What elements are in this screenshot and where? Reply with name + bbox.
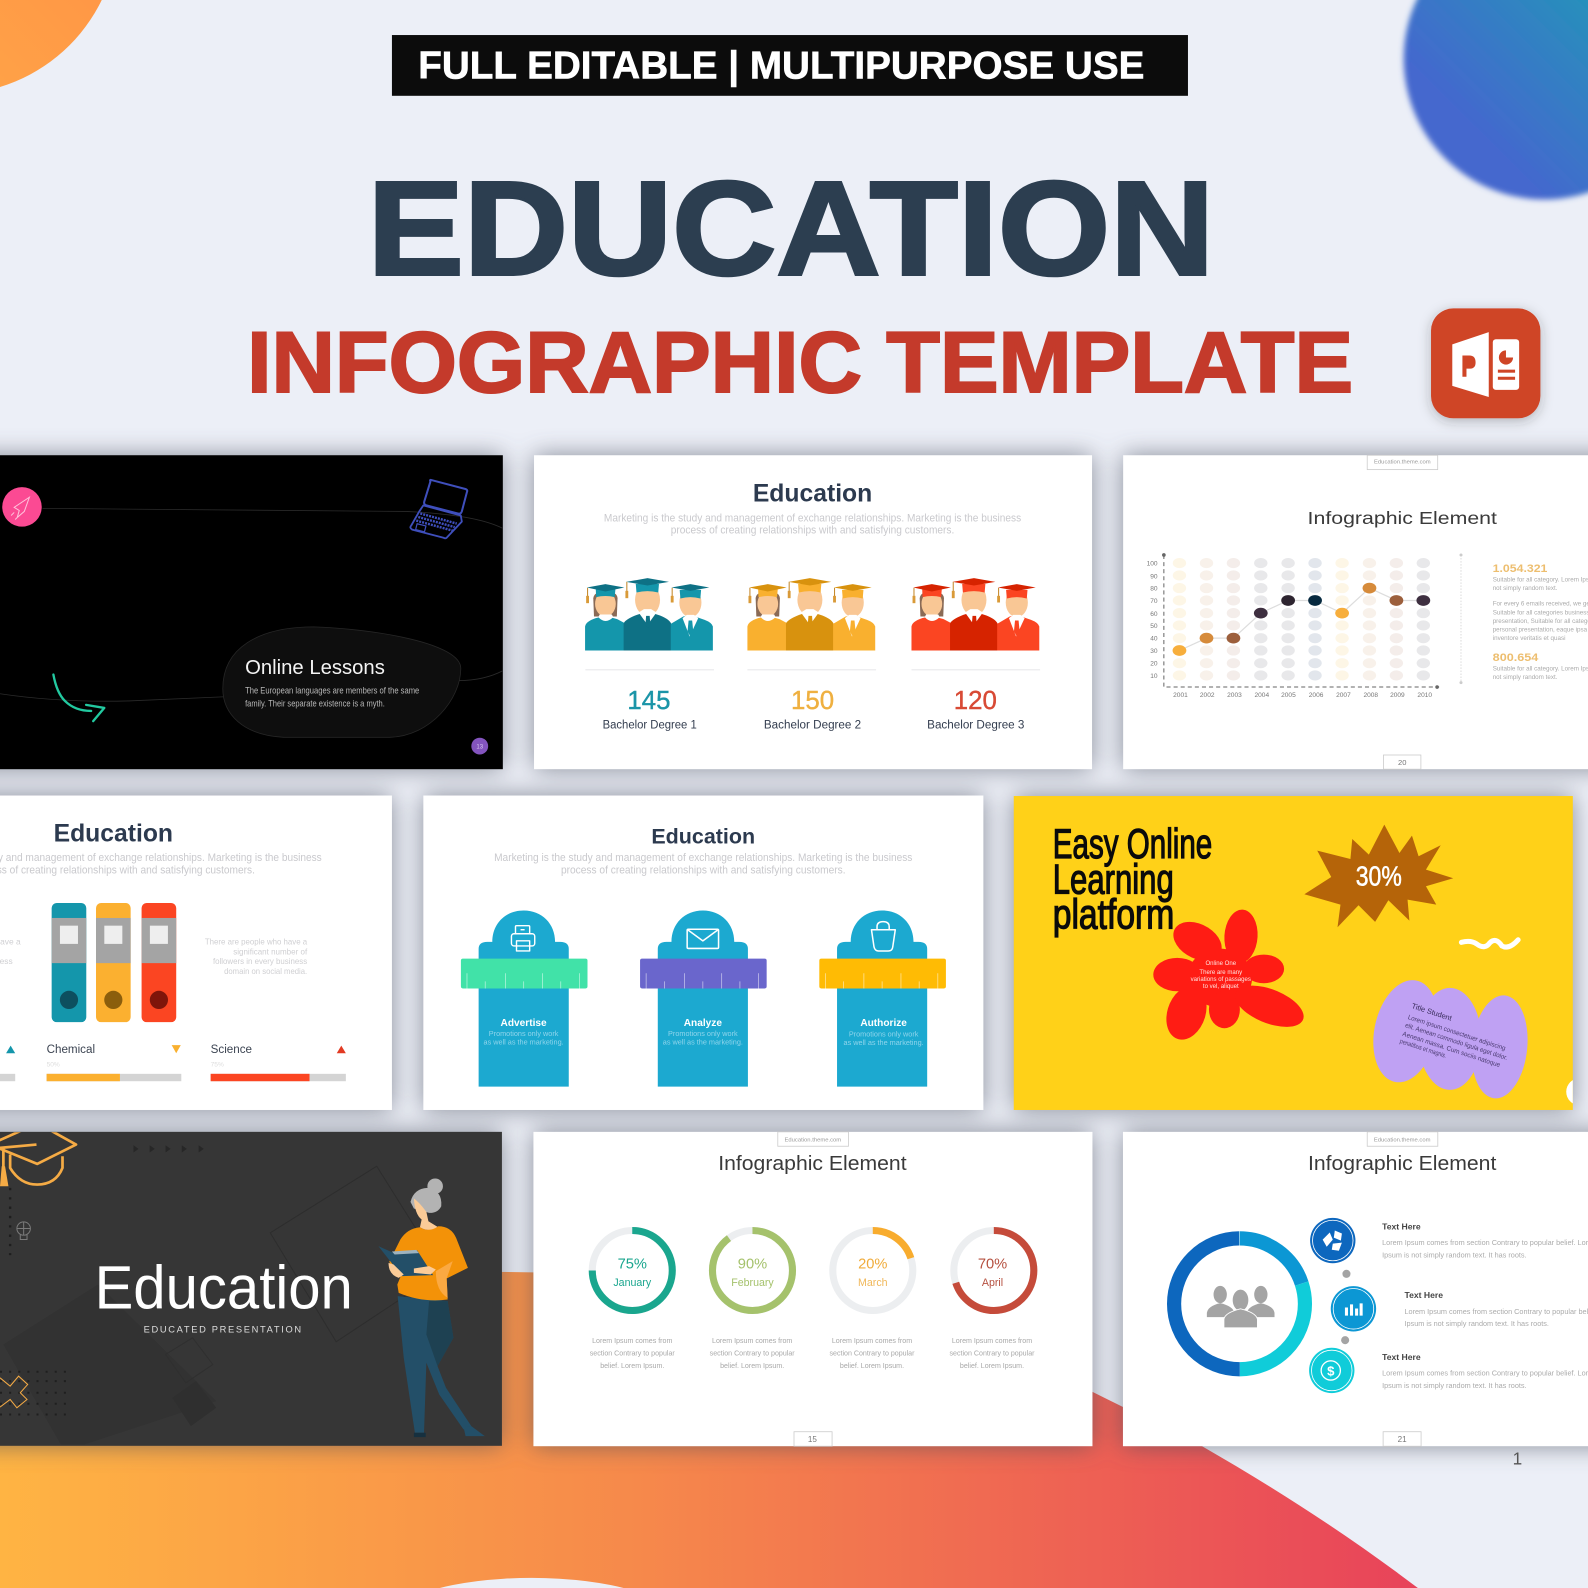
ring: march: section Contrary to popular bbox=[829, 1349, 915, 1357]
pillar: advertise: Promotions only work bbox=[489, 1029, 559, 1038]
description: process of creating relationships with and satisfying customers. bbox=[671, 525, 954, 537]
description bbox=[0, 852, 322, 877]
icon: recycle badge bbox=[1310, 1218, 1355, 1263]
top tab bbox=[1367, 1132, 1438, 1146]
icon: gold graduates bbox=[747, 578, 875, 650]
pillar: analyze: Promotions only work bbox=[668, 1029, 738, 1038]
purple blob callout: penatibus et magnis. bbox=[1399, 1038, 1447, 1060]
heading bbox=[1053, 820, 1212, 938]
chart: dot matrix: 60 bbox=[1150, 611, 1158, 618]
heading: Infographic Element bbox=[1308, 1152, 1497, 1175]
bottom tab: 20 bbox=[1398, 758, 1406, 767]
donut chart bbox=[1174, 1238, 1305, 1369]
ring: april: April bbox=[982, 1277, 1003, 1289]
text block: two: Ipsum is not simply random text. It has roots. bbox=[1404, 1319, 1549, 1328]
ring: march: Lorem Ipsum comes from bbox=[832, 1337, 912, 1345]
panel: dot line chart bbox=[1123, 455, 1588, 769]
icon: bag bbox=[871, 922, 895, 951]
ring: february: Lorem Ipsum comes from bbox=[712, 1337, 792, 1345]
description bbox=[604, 513, 1021, 537]
ring: february: belief. Lorem Ipsum. bbox=[720, 1362, 784, 1370]
decorative shapes bbox=[3, 1284, 216, 1444]
text block: chart stats: 1.054.321 bbox=[1493, 563, 1547, 575]
panel: bachelor degrees bbox=[534, 455, 1092, 769]
flower callout: to vel, aliquet bbox=[1203, 984, 1239, 990]
text block: chart stats: Suitable for all categories business bbox=[1493, 609, 1588, 616]
ring: january: Lorem Ipsum comes from bbox=[592, 1337, 672, 1345]
flower callout bbox=[1153, 909, 1311, 1044]
heading: Infographic Element bbox=[718, 1152, 907, 1175]
panel: education dark cover bbox=[0, 1130, 502, 1446]
ring: february: February bbox=[731, 1277, 774, 1289]
ring: january bbox=[590, 1230, 675, 1370]
bottom tab bbox=[794, 1432, 832, 1446]
panel: donut rings bbox=[533, 1132, 1092, 1446]
icon: chart badge bbox=[1331, 1286, 1376, 1331]
chart: dot matrix: 90 bbox=[1150, 573, 1158, 580]
callout blob: online lessons: Online Lessons bbox=[245, 656, 385, 679]
chart: dot matrix: 40 bbox=[1150, 636, 1158, 643]
flower callout: Online One bbox=[1205, 961, 1237, 967]
squiggle bbox=[1461, 940, 1518, 947]
top tab: Education.theme.com bbox=[1374, 1137, 1431, 1143]
ring: march: March bbox=[858, 1277, 888, 1289]
chart: dot matrix: 2009 bbox=[1390, 692, 1405, 699]
ring: april bbox=[950, 1230, 1035, 1370]
pillar: authorize: Promotions only work bbox=[849, 1030, 919, 1039]
chart: dot matrix: 100 bbox=[1147, 561, 1158, 568]
stat: 145: Bachelor Degree 1 bbox=[603, 719, 697, 732]
top tab: Education.theme.com bbox=[785, 1137, 841, 1143]
callout blob: online lessons bbox=[223, 627, 461, 737]
banner bbox=[392, 35, 1188, 96]
illustration: woman bbox=[378, 1179, 485, 1437]
icon: printer bbox=[511, 926, 535, 951]
progress: science: 75% bbox=[211, 1061, 224, 1068]
callout blob: online lessons: The European languages are members of the same bbox=[245, 686, 419, 696]
text block: chart stats bbox=[1493, 563, 1588, 681]
stat: 120: Bachelor Degree 3 bbox=[927, 719, 1024, 732]
bottom tab: 21 bbox=[1398, 1435, 1407, 1444]
stat: 150: Bachelor Degree 2 bbox=[764, 719, 861, 732]
ring: january: section Contrary to popular bbox=[590, 1349, 675, 1357]
top tab bbox=[778, 1132, 848, 1146]
top tab bbox=[1367, 455, 1438, 470]
ring: april: section Contrary to popular bbox=[950, 1349, 1035, 1357]
chart: dot matrix: 20 bbox=[1150, 660, 1158, 667]
ring: february bbox=[710, 1230, 795, 1370]
heading: Learning bbox=[1053, 856, 1174, 903]
pillar: analyze: Analyze bbox=[684, 1018, 722, 1029]
description: process of creating relationships with and satisfying customers. bbox=[561, 865, 846, 877]
pillar: advertise bbox=[461, 910, 587, 1087]
text block: three bbox=[1382, 1352, 1588, 1390]
stat: 150: 150 bbox=[791, 687, 834, 715]
burst: 30 percent: 30% bbox=[1356, 861, 1402, 892]
icon: teal graduates bbox=[585, 578, 713, 650]
stat: 150 bbox=[764, 687, 861, 732]
chart: dot matrix: 30 bbox=[1150, 648, 1158, 655]
text block: chart stats: not simply random text. bbox=[1493, 674, 1558, 681]
chart: dot matrix: 50 bbox=[1150, 623, 1158, 630]
text block: chart stats: 800.654 bbox=[1493, 652, 1538, 664]
ring: april: belief. Lorem Ipsum. bbox=[960, 1362, 1024, 1370]
ring: february: 90% bbox=[738, 1256, 767, 1272]
subtitle: INFOGRAPHIC TEMPLATE bbox=[247, 315, 1353, 411]
top tab: Education.theme.com bbox=[1374, 459, 1431, 465]
chart: dot matrix: 2008 bbox=[1363, 692, 1378, 699]
divider bbox=[1459, 553, 1463, 684]
icon: laptop bbox=[410, 480, 467, 538]
chart: dot matrix: 2002 bbox=[1200, 692, 1215, 699]
banner: FULL EDITABLE | MULTIPURPOSE USE bbox=[418, 44, 1144, 87]
text block: two bbox=[1404, 1290, 1588, 1328]
chart: dot matrix: 2006 bbox=[1309, 692, 1324, 699]
panel: binders bbox=[0, 796, 392, 1110]
ring: february: section Contrary to popular bbox=[710, 1349, 795, 1357]
text block: right: domain on social media. bbox=[224, 966, 307, 976]
pillar: analyze: as well as the marketing. bbox=[663, 1038, 743, 1047]
decorative gradient wave at bottom bbox=[0, 1271, 1418, 1588]
text block: one: Text Here bbox=[1382, 1221, 1421, 1231]
heading: Infographic Element bbox=[1308, 508, 1497, 528]
text block: three: Text Here bbox=[1382, 1352, 1421, 1362]
decorative white ellipse bottom bbox=[390, 1578, 673, 1588]
ring: january: 75% bbox=[618, 1256, 647, 1272]
burst: 30 percent bbox=[1304, 825, 1453, 927]
panel: people circles bbox=[1123, 1132, 1588, 1446]
decorative blue blob top right bbox=[1404, 0, 1588, 200]
heading: Education bbox=[651, 825, 755, 849]
chart: dot matrix: 10 bbox=[1150, 673, 1158, 680]
panel: online lessons bbox=[0, 455, 503, 769]
description: Marketing is the study and management of exchange relationships. Marketing is the business bbox=[604, 513, 1021, 525]
icon: PowerPoint bbox=[1431, 308, 1540, 418]
stat: 120 bbox=[927, 687, 1024, 732]
chart: dot matrix: 2005 bbox=[1281, 692, 1296, 699]
tagline: EDUCATED PRESENTATION bbox=[144, 1324, 301, 1334]
flower callout: There are many bbox=[1199, 970, 1243, 976]
description bbox=[494, 852, 912, 877]
ring: april: Lorem Ipsum comes from bbox=[952, 1337, 1032, 1345]
chart: dot matrix: 2010 bbox=[1417, 692, 1432, 699]
heading: Education bbox=[95, 1253, 353, 1321]
icon: bulb bbox=[17, 1222, 30, 1240]
text block: chart stats: not simply random text. bbox=[1493, 585, 1558, 592]
purple blob callout: Lorem ipsum consectetuer adipiscing bbox=[1407, 1014, 1507, 1052]
icon: cross outline bbox=[0, 1376, 28, 1408]
chart: dot matrix bbox=[1147, 553, 1439, 699]
text block: one bbox=[1382, 1221, 1588, 1260]
chart: dot matrix: 2004 bbox=[1254, 692, 1269, 699]
panel: online learning yellow bbox=[1014, 796, 1588, 1110]
ring: april: 70% bbox=[978, 1256, 1007, 1272]
pillar: analyze bbox=[640, 910, 767, 1087]
title: EDUCATION bbox=[368, 154, 1214, 303]
text block: right: followers in every business bbox=[213, 956, 307, 966]
chart: dot matrix: 2007 bbox=[1336, 692, 1351, 699]
text block: three: Ipsum is not simply random text. It has roots. bbox=[1382, 1381, 1527, 1390]
progress: chemical: 50% bbox=[47, 1061, 60, 1068]
heading: Easy Online bbox=[1053, 820, 1212, 867]
text block: right: significant number of bbox=[233, 947, 308, 957]
stat: 145 bbox=[603, 687, 697, 732]
arrow: green hand-drawn bbox=[53, 674, 104, 721]
heading: Education bbox=[753, 481, 872, 508]
purple blob callout: Aenean massa. Cum sociis natoque bbox=[1401, 1031, 1501, 1069]
icon: dollar badge bbox=[1309, 1348, 1354, 1393]
page badge: 13 bbox=[476, 744, 484, 750]
purple blob callout: elit. Aenean commodo ligula eget dolor. bbox=[1404, 1022, 1508, 1062]
icon: pink rocket badge bbox=[2, 487, 42, 527]
panel: rulers bbox=[423, 796, 983, 1110]
progress: left fragment bbox=[0, 1046, 15, 1081]
text block: right bbox=[205, 937, 308, 976]
page badge bbox=[471, 738, 488, 755]
icon: red graduates bbox=[911, 578, 1039, 650]
heading: Education bbox=[54, 820, 173, 847]
stat: 120: 120 bbox=[954, 687, 997, 715]
decorative orange blob top left bbox=[0, 0, 118, 94]
description: Marketing is the study and management of exchange relationships. Marketing is the business bbox=[494, 852, 912, 864]
progress: chemical: Chemical bbox=[47, 1043, 95, 1056]
progress: science: Science bbox=[211, 1043, 252, 1056]
pillar: authorize: Authorize bbox=[860, 1018, 907, 1029]
purple blob callout: Title Student bbox=[1411, 1001, 1454, 1023]
icon: graduation cap bbox=[0, 1130, 76, 1186]
chart: dot matrix: 2001 bbox=[1173, 692, 1188, 699]
chart: dot matrix: 2003 bbox=[1227, 692, 1242, 699]
progress: science bbox=[211, 1043, 346, 1081]
flower callout: variations of passages bbox=[1191, 977, 1251, 983]
text block: one: Ipsum is not simply random text. It has roots. bbox=[1382, 1251, 1527, 1260]
text block: two: Text Here bbox=[1404, 1290, 1443, 1300]
chart: dot matrix: 70 bbox=[1150, 598, 1158, 605]
icon: envelope bbox=[687, 929, 719, 948]
text block: left fragment bbox=[0, 937, 21, 966]
icon: people bbox=[1207, 1286, 1275, 1328]
pillar: authorize: as well as the marketing. bbox=[844, 1038, 924, 1047]
icon: dollar badge: $ bbox=[1327, 1363, 1335, 1378]
ring: january: January bbox=[613, 1277, 652, 1289]
callout blob: online lessons: family. Their separate existence is a myth. bbox=[245, 698, 385, 708]
bottom tab bbox=[1383, 755, 1421, 769]
purple blob callout bbox=[1365, 975, 1532, 1100]
icon: teal binder bbox=[52, 903, 86, 1022]
chart: dot matrix: 80 bbox=[1150, 585, 1158, 592]
bottom tab bbox=[1383, 1432, 1421, 1446]
pillar: advertise: as well as the marketing. bbox=[484, 1038, 564, 1047]
ring: march bbox=[829, 1230, 915, 1370]
heading: platform bbox=[1053, 891, 1174, 938]
pillar: authorize bbox=[819, 910, 946, 1087]
text block: chart stats: inventore veritatis et quasi bbox=[1493, 635, 1565, 642]
text block: right: There are people who have a bbox=[205, 937, 307, 947]
page number: 1 bbox=[1513, 1448, 1522, 1468]
ring: march: 20% bbox=[858, 1256, 887, 1272]
ring: march: belief. Lorem Ipsum. bbox=[840, 1362, 904, 1370]
icon: gold binder bbox=[96, 903, 131, 1022]
ring: january: belief. Lorem Ipsum. bbox=[600, 1362, 664, 1370]
bottom tab: 15 bbox=[808, 1435, 817, 1444]
progress: chemical bbox=[47, 1043, 181, 1081]
icon: red binder bbox=[142, 903, 176, 1022]
stat: 145: 145 bbox=[627, 687, 671, 715]
panel shadows bbox=[0, 455, 1588, 1446]
pillar: advertise: Advertise bbox=[501, 1018, 547, 1029]
